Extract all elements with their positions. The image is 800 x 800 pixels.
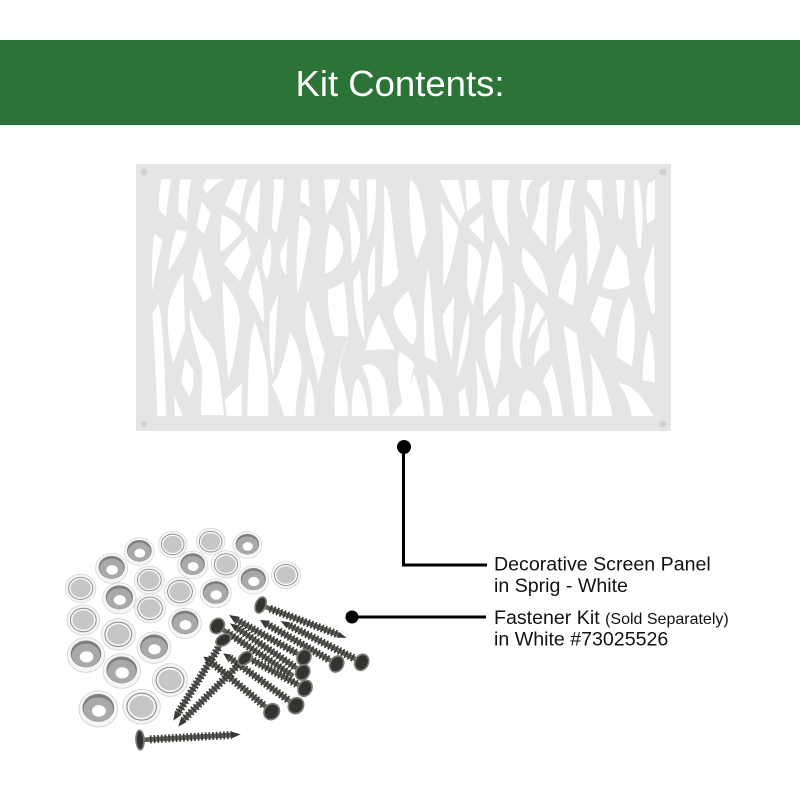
fastener caps xyxy=(65,528,301,727)
leader line to screen panel xyxy=(397,440,487,565)
panel cut-outs: left half xyxy=(152,179,416,416)
label: fastener kit: in White #73025526 xyxy=(494,628,668,650)
title banner xyxy=(0,40,800,125)
label: fastener kit: Fastener Kit (Sold Separately) xyxy=(494,607,729,629)
panel cut-outs: right half xyxy=(392,180,655,416)
panel mounting holes xyxy=(140,168,666,428)
screw tips xyxy=(173,615,347,738)
leader line to fastener kit xyxy=(346,610,486,624)
title text: Kit Contents: xyxy=(296,63,504,104)
decorative screen panel xyxy=(136,164,671,431)
fastener screws xyxy=(135,595,371,750)
label: decorative screen panel: Decorative Screen Panel xyxy=(494,554,711,576)
label: decorative screen panel: in Sprig - White xyxy=(494,575,628,597)
